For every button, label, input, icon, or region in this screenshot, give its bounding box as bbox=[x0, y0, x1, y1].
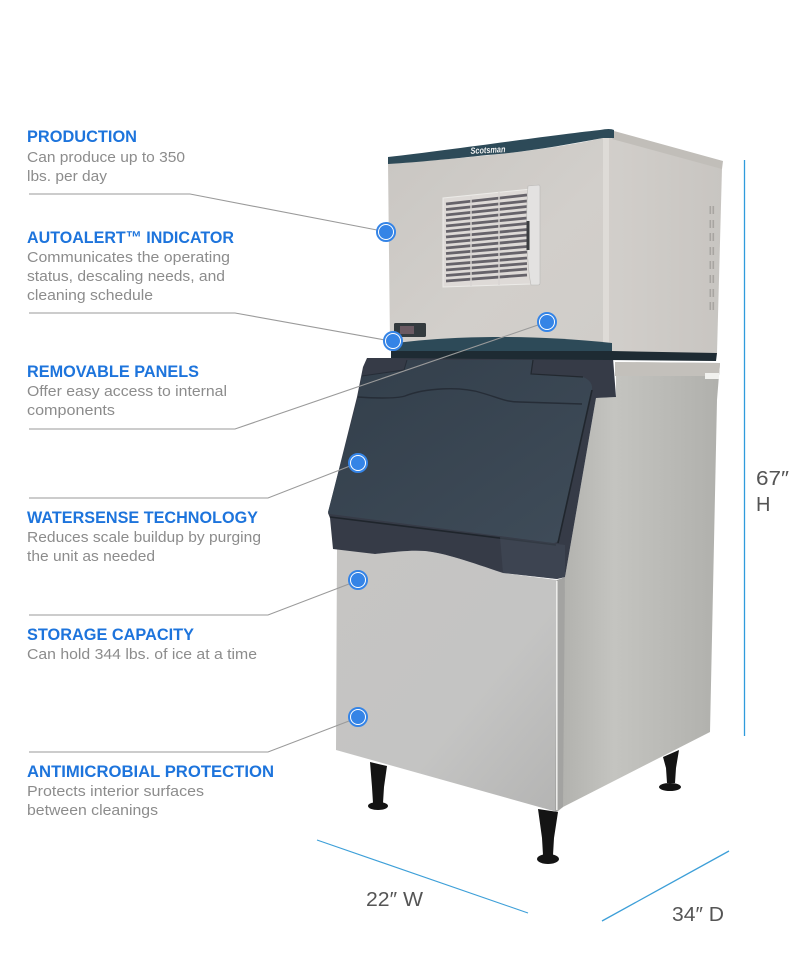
ice maker corner bbox=[603, 138, 609, 344]
side vents bbox=[710, 206, 714, 310]
description: Can hold 344 lbs. of ice at a time bbox=[27, 646, 257, 663]
grille ribs bbox=[471, 192, 499, 286]
grille bbox=[443, 189, 531, 287]
dark base bbox=[391, 351, 717, 361]
width line bbox=[317, 840, 528, 913]
heading: STORAGE CAPACITY bbox=[27, 625, 195, 644]
bottom blue band bbox=[392, 337, 612, 353]
storage bin front panel bbox=[336, 548, 557, 812]
description: cleaning schedule bbox=[27, 287, 153, 304]
callout: antimicrobial protection bbox=[27, 708, 368, 819]
display digits bbox=[400, 326, 414, 334]
latch slot bbox=[526, 221, 530, 250]
leader line bbox=[29, 584, 349, 615]
description: Reduces scale buildup by purging bbox=[27, 529, 261, 546]
callout: production bbox=[27, 127, 396, 242]
leader line bbox=[29, 325, 538, 429]
depth line bbox=[602, 851, 729, 921]
brand name: Scotsman bbox=[470, 144, 506, 156]
callout: autoalert indicator bbox=[27, 228, 402, 350]
bin top strip bbox=[615, 362, 720, 376]
front leg bbox=[537, 809, 559, 864]
leader line bbox=[29, 721, 349, 752]
callout: removable panels bbox=[27, 312, 556, 429]
ice machine product bbox=[328, 129, 723, 864]
louvers bbox=[446, 195, 527, 281]
marker dot bbox=[348, 454, 368, 472]
depth label: 34″ D bbox=[672, 904, 724, 926]
bin corner edge bbox=[555, 577, 565, 812]
dimension: height bbox=[744, 160, 789, 736]
heading: WATERSENSE TECHNOLOGY bbox=[27, 508, 259, 527]
description: status, descaling needs, and bbox=[27, 268, 225, 285]
description: the unit as needed bbox=[27, 548, 155, 565]
leader line bbox=[29, 313, 385, 340]
bin hood bbox=[328, 358, 616, 579]
left hood tab bbox=[362, 360, 407, 376]
display panel bbox=[394, 323, 426, 337]
description: components bbox=[27, 402, 115, 419]
description: Offer easy access to internal bbox=[27, 383, 227, 400]
dimension: depth bbox=[602, 851, 729, 926]
description: Protects interior surfaces bbox=[27, 783, 204, 800]
height line bbox=[744, 160, 746, 736]
description: lbs. per day bbox=[27, 168, 108, 185]
dimension: width bbox=[317, 840, 528, 913]
height label: 67″ bbox=[756, 468, 789, 490]
top blue band bbox=[388, 129, 614, 164]
door top ridge bbox=[358, 389, 582, 404]
ice maker side panel bbox=[604, 136, 722, 353]
rear right leg bbox=[659, 750, 681, 791]
heading: ANTIMICROBIAL PROTECTION bbox=[27, 762, 274, 781]
description: between cleanings bbox=[27, 802, 158, 819]
bin corner highlight bbox=[556, 581, 558, 810]
leader line bbox=[29, 194, 377, 230]
height label: H bbox=[756, 494, 770, 516]
marker dot bbox=[384, 332, 402, 350]
description: Communicates the operating bbox=[27, 249, 230, 266]
door handle recess bbox=[531, 360, 583, 377]
marker dot bbox=[376, 222, 396, 242]
bin label bbox=[705, 373, 719, 379]
door bottom shadow line bbox=[330, 517, 556, 545]
callout: storage capacity bbox=[27, 570, 368, 663]
heading: AUTOALERT™ INDICATOR bbox=[27, 228, 234, 247]
description: Can produce up to 350 bbox=[27, 149, 185, 166]
ice maker front panel bbox=[388, 138, 604, 344]
hinged door bbox=[328, 360, 592, 543]
grille frame bbox=[443, 189, 531, 287]
width label: 22″ W bbox=[366, 889, 423, 911]
grille latch bbox=[527, 185, 540, 285]
marker dot bbox=[538, 312, 556, 332]
top strip bbox=[612, 131, 723, 169]
marker dot bbox=[348, 708, 368, 726]
marker dot bbox=[348, 570, 368, 590]
leader line bbox=[29, 466, 350, 498]
storage bin side panel bbox=[557, 362, 720, 812]
rear left leg bbox=[368, 762, 388, 810]
door right shadow edge bbox=[558, 390, 592, 543]
heading: PRODUCTION bbox=[27, 127, 137, 146]
callout: watersense technology bbox=[27, 454, 368, 565]
heading: REMOVABLE PANELS bbox=[27, 362, 199, 381]
hood lip shade bbox=[500, 537, 565, 579]
